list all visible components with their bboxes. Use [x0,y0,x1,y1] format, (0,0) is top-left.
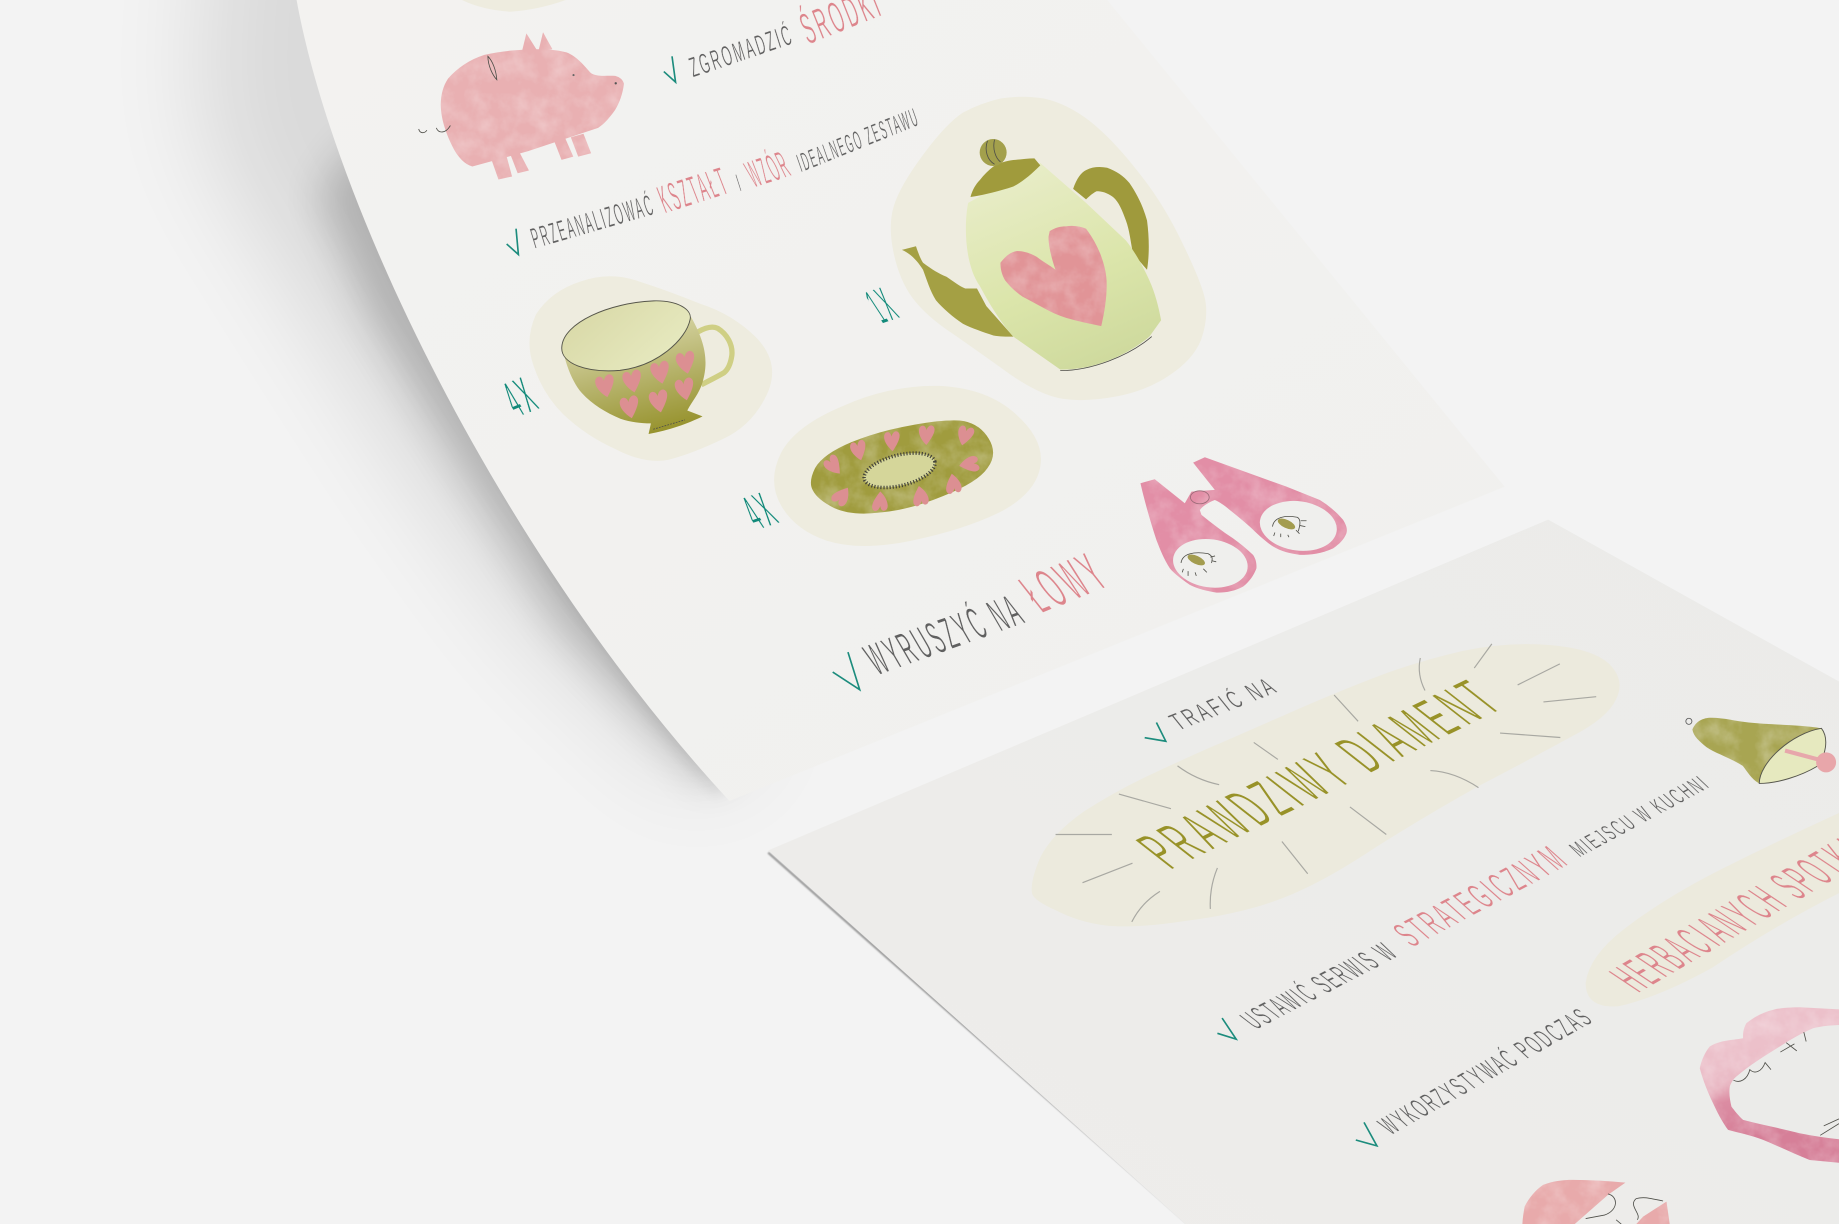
blob behind cup [529,276,772,461]
label: 4X cups: 4X [493,366,549,428]
sheet shadow [199,0,751,798]
checklist item: analyse shape and pattern: I [733,169,745,197]
checklist item: use during tea meetings [1356,820,1839,1146]
icon: cup with hearts [562,301,732,434]
blob behind saucer [774,386,1041,546]
icon: bell [1686,718,1836,783]
blob: true diamond [1032,644,1620,926]
checklist item: set the tea set in a strategic place [1217,771,1716,1039]
icon: binoculars [1140,457,1347,593]
checklist item: analyse shape and pattern: PRZEANALIZOWAĆ [527,188,658,255]
blob: true diamond: PRAWDZIWY DIAMENT [1121,667,1520,879]
checklist item: go hunting: ŁOWY [1007,540,1122,624]
icon: teapot [902,139,1161,371]
checklist item: go hunting: WYRUSZYĆ NA [856,584,1034,684]
checklist item: find [1145,672,1284,741]
checklist item: set the tea set in a strategic place: USTAWIĆ SERWIS W [1232,937,1407,1035]
text: IDEALNEGO ZESTAWU [794,103,923,178]
checklist item: find: TRAFIĆ NA [1163,672,1284,736]
icon: piggy bank [419,32,624,179]
icon: saucer with hearts [811,420,993,514]
checklist item: analyse shape and pattern: KSZTAŁT [652,158,735,221]
sheet 1 paper [296,0,1505,801]
label: 4X saucers: 4X [731,482,790,540]
checklist item: go hunting [833,540,1122,690]
checklist item: set the tea set in a strategic place: STRATEGICZNYM [1384,838,1579,954]
icon: large mouth [1700,1007,1839,1163]
blob behind teapot [891,97,1206,400]
checklist item: analyse shape and pattern [507,103,923,255]
blob: cropped top shape [452,0,581,12]
checklist item: analyse shape and pattern: WZÓR [739,143,798,195]
checklist item: set the tea set in a strategic place: MIEJSCU W KUCHNI [1564,771,1716,862]
sheet 2 paper [768,520,1839,1224]
checklist item: use during tea meetings: WYKORZYSTYWAĆ PODCZAS [1370,1002,1600,1140]
blob: tea meetings [1586,809,1839,1007]
icon: small mouth [1522,1180,1670,1224]
label: 1X teapot: 1X [856,277,909,333]
